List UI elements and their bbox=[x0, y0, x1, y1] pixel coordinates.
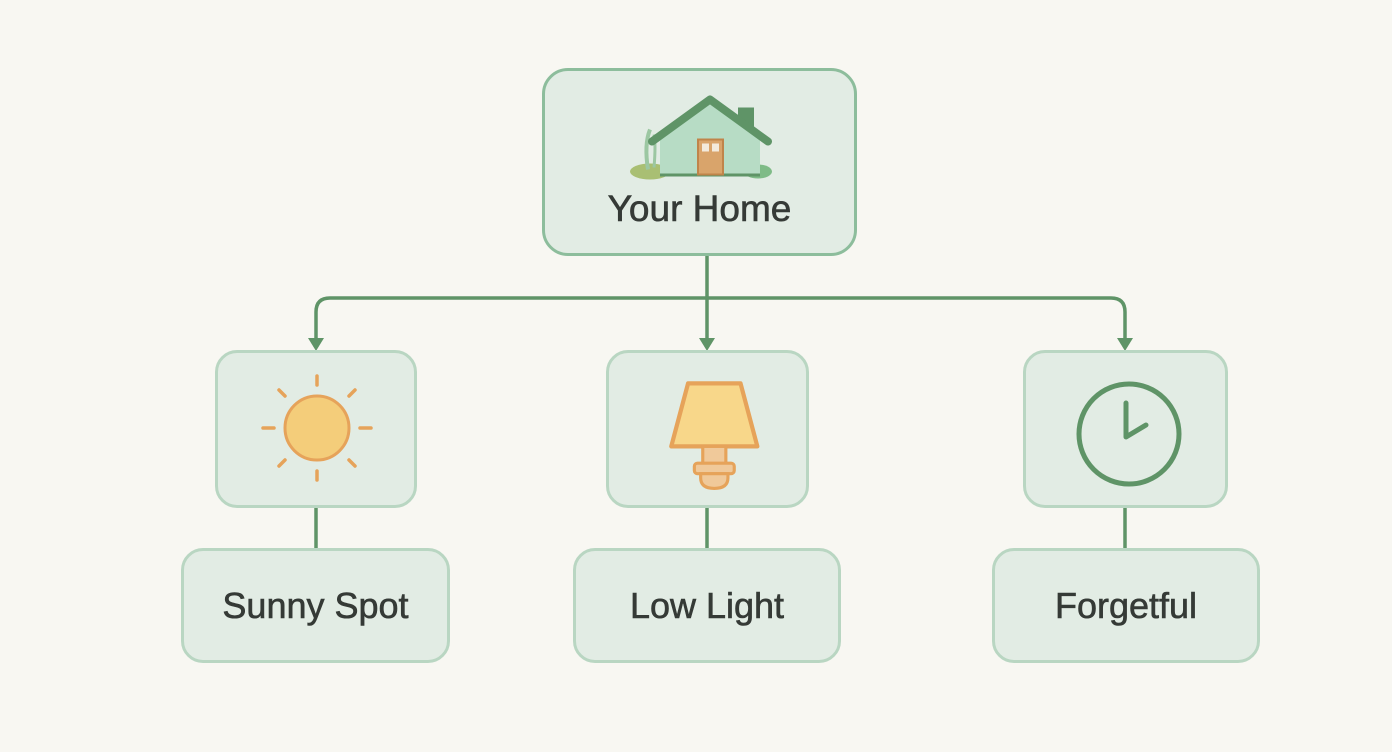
icon: house bbox=[630, 95, 772, 180]
icon: sun bbox=[261, 374, 373, 482]
label: Sunny Spot bbox=[181, 548, 450, 663]
label: Low Light bbox=[573, 548, 841, 663]
top box: Your Home bbox=[542, 68, 857, 256]
panel: lamp icon bbox=[606, 350, 809, 508]
icon: clock bbox=[1076, 382, 1182, 486]
label: Sunny Spot: Sunny Spot bbox=[222, 584, 409, 626]
heading: Your Home: Your Home bbox=[608, 188, 791, 229]
label: Forgetful bbox=[992, 548, 1260, 663]
label: Low Light: Low Light bbox=[630, 584, 784, 626]
label: Forgetful: Forgetful bbox=[1055, 584, 1197, 626]
icon: lamp bbox=[669, 381, 760, 490]
panel: clock icon bbox=[1023, 350, 1228, 508]
panel: sunny icon bbox=[215, 350, 417, 508]
